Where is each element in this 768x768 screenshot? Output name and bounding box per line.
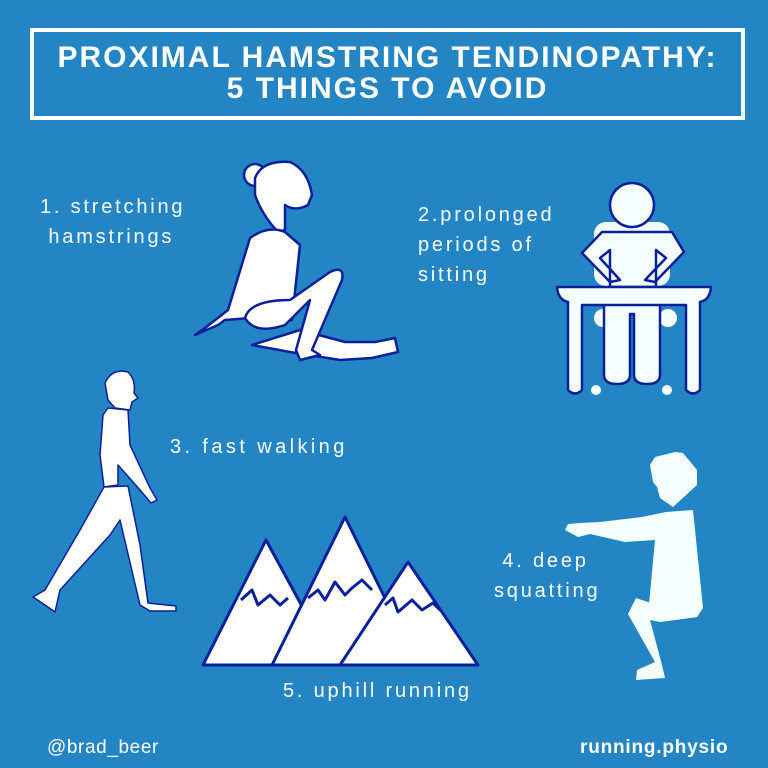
text: 2 sitting: sitting [418, 264, 490, 286]
handle right: running.physio [580, 737, 728, 758]
title box: 5 THINGS TO AVOID [227, 72, 548, 105]
icon: walking man [33, 371, 176, 612]
icon: mountains [203, 517, 478, 665]
icon: sitting person at desk [557, 183, 711, 395]
icon: stretching woman [195, 162, 398, 360]
text: 1 stretching: hamstrings [48, 226, 174, 248]
text: 3 walking: 3. fast walking [170, 436, 348, 458]
title box [30, 28, 745, 120]
text: 2 sitting: 2.prolonged [418, 204, 554, 226]
text: 4 squatting: squatting [494, 580, 600, 602]
text: 1 stretching [40, 196, 185, 248]
text: 1 stretching: 1. stretching [40, 196, 185, 218]
text: 4 squatting [494, 550, 600, 602]
text: 2 sitting [418, 204, 554, 286]
handle left: @brad_beer [47, 737, 159, 758]
text: 4 squatting: 4. deep [502, 550, 589, 572]
icon: squatting person [565, 452, 703, 680]
text: 2 sitting: periods of [418, 234, 534, 256]
title box: PROXIMAL HAMSTRING TENDINOPATHY: [57, 41, 718, 74]
text: 5 uphill: 5. uphill running [283, 680, 472, 702]
